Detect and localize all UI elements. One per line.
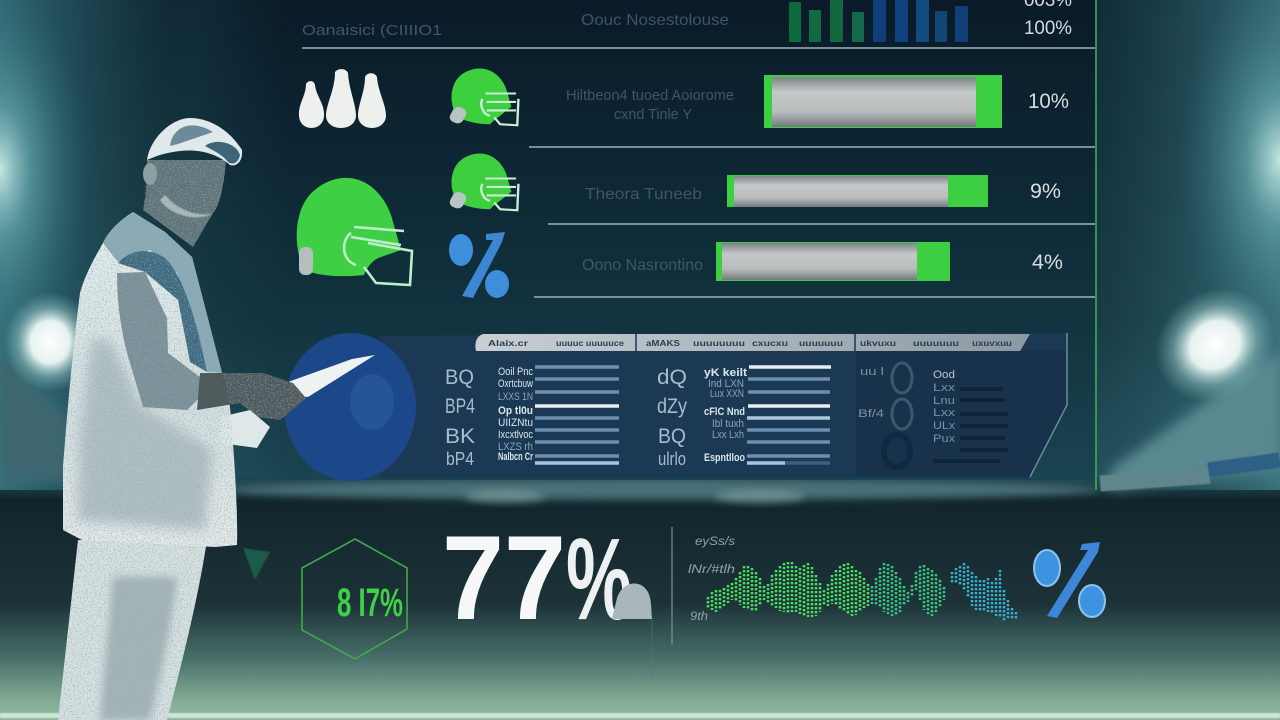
column 1 row glyphs: BP4: [445, 395, 475, 418]
row 2 label: Theora Tuneeb: [585, 186, 702, 203]
table header strip: cxucxu: [752, 339, 788, 348]
row 3 label: Oono Nasrontino: [582, 257, 703, 274]
row 2 value: 9%: [1030, 180, 1061, 203]
cap brim underside: [205, 142, 240, 164]
icon: blue percent large: [1034, 542, 1105, 618]
table header strip: uuuuuuuu: [693, 339, 745, 348]
dotted wave blue: [952, 563, 1016, 622]
column 3 label text: Bf/4: [858, 408, 884, 420]
column 1 row glyphs: bP4: [446, 449, 474, 469]
wave axis labels: [688, 534, 735, 623]
top percent values: 100%: [1024, 18, 1072, 39]
top percent values: [1024, 0, 1072, 39]
dark shoulder stripe: [118, 251, 207, 372]
column 3 label text: Lxx: [933, 407, 956, 419]
row 3 value: 4%: [1032, 251, 1063, 274]
sleeve: [117, 272, 200, 410]
column 3 label text: Ood: [933, 369, 955, 381]
table header strip: uxuvxuu: [972, 339, 1012, 348]
column 2 row labels: Ind LXN: [708, 378, 744, 390]
coach shirt: [63, 212, 237, 547]
hexagon stat badge: [302, 539, 407, 659]
table header strip: aMAKS: [646, 339, 681, 348]
column 3 dark stat bars: [934, 367, 1030, 461]
big stat: 77%: %: [566, 514, 632, 644]
cap: [147, 118, 242, 165]
vertical divider: [671, 527, 673, 645]
divider lines: [302, 48, 1095, 297]
section: top summary row: [302, 0, 1072, 42]
icon: blue percent small: [449, 232, 509, 298]
row 1 label: Hiltbeon4 tuoed Aoiorome: [566, 87, 734, 104]
coach trousers: [58, 540, 207, 720]
row 1 value: 10%: [1028, 90, 1069, 113]
big stat: 77%: [442, 511, 652, 645]
column 1 row labels: Oxrtcbuw: [498, 378, 533, 390]
heading: left top label: Oanaisici (CIIIIO1: [302, 22, 442, 39]
table header strip: ukvuxu: [860, 339, 896, 348]
column 2 row labels: Lux XXN: [710, 388, 744, 400]
column 3 label text: Pux: [933, 433, 956, 445]
icon: green helmet small 2: [448, 154, 518, 210]
column 1 row labels: LXZS rh: [498, 441, 533, 453]
heading: center top label: Oouc Nosestolouse: [581, 12, 729, 29]
icon: green helmet large: [297, 178, 412, 285]
table header strip: uuuuuuu: [913, 339, 959, 348]
column 1 stat bars: [535, 367, 619, 463]
column 2 row glyphs: BQ: [658, 425, 686, 448]
column 1 row glyphs: [445, 366, 475, 469]
wave axis labels: 9th: [690, 609, 708, 623]
figure: coach holding clipboard: [58, 118, 375, 720]
dotted wave green: [708, 562, 868, 617]
main data panel backdrop: [200, 0, 1096, 480]
speckle overlay: [58, 160, 306, 720]
column 1 row labels: [498, 366, 533, 463]
column 3 label text: Lnu: [933, 395, 955, 407]
big stat: 77%: 77: [442, 511, 566, 645]
column 2 row glyphs: ulrlo: [658, 449, 686, 469]
column 1 row glyphs: BK: [445, 425, 475, 448]
column 3 label text: Lxx: [933, 382, 956, 394]
icon: green helmet small 1: [448, 69, 518, 125]
column 2 row labels: yK keilt: [704, 367, 747, 379]
neck and head: [143, 160, 226, 247]
second white hand: [220, 410, 270, 448]
column 2 row labels: Espntlloo: [704, 452, 745, 464]
column 1 row labels: Ixcxtlvoc: [498, 429, 533, 441]
row 2: label, bar, value: [585, 175, 1061, 207]
column 3 ring gauges: [884, 363, 912, 467]
row 3: label, bar, value: [582, 242, 1063, 281]
chest panel: [103, 212, 222, 373]
trouser shading: [100, 577, 177, 720]
table header strip: uuuuc uuuuuce: [556, 339, 625, 348]
wave axis labels: eySs/s: [695, 534, 735, 548]
column 1 row labels: UIIZNtu: [498, 417, 533, 429]
icon: three white bottles: [299, 69, 386, 128]
table header strip: uuuuuuu: [799, 339, 843, 348]
row 2 bar: [727, 175, 988, 207]
column 2 row glyphs: [657, 366, 687, 469]
blue circle emblem: [284, 333, 416, 481]
row 1 sublabel: cxnd Tinle Y: [614, 106, 692, 123]
column 2 row labels: Lxx Lxh: [712, 429, 744, 441]
wave axis labels: lNr/#tlh: [688, 562, 735, 576]
column 3 label text: [858, 366, 956, 445]
column 1 row labels: Ooil Pnc: [498, 366, 533, 378]
row 1 bar: [764, 75, 1002, 128]
column 2 row glyphs: dQ: [657, 366, 687, 389]
vertical green edge line: [1095, 0, 1097, 490]
wave chart with small labels: [688, 534, 1016, 623]
column 1 row labels: LXXS 1N: [498, 391, 533, 403]
column 3 label text: ULx: [933, 420, 956, 432]
column 2 row glyphs: dZy: [657, 395, 687, 418]
table header strip: [475, 334, 1030, 351]
column 2 stat bars: [747, 367, 831, 463]
forearm and hand: [197, 373, 306, 420]
row 3 bar: [716, 242, 950, 281]
clipboard: [288, 355, 375, 397]
dotted wave teal: [872, 563, 944, 616]
column 1 row labels: Nalbcn Cr: [498, 451, 533, 463]
cap panel: [170, 125, 213, 146]
column 2 row labels: Ibl tuxh: [712, 418, 744, 430]
column 1 row labels: Op tl0u: [498, 405, 533, 417]
column 2 row labels: [704, 367, 747, 464]
mini bar chart: [789, 0, 968, 42]
column 3 label text: uu l: [860, 366, 884, 378]
hexagon stat badge: 8 I7%: [337, 581, 403, 625]
ear: [143, 163, 157, 185]
table header strip: Alaix.cr: [488, 339, 528, 348]
panel: statistics table: [284, 333, 1068, 481]
column 2 row labels: cFlC Nnd: [704, 406, 745, 418]
chin highlight: [160, 195, 212, 217]
row 1: label, bar, value: [566, 75, 1069, 128]
column 1 row glyphs: BQ: [445, 366, 474, 389]
shirt shading: [78, 340, 212, 530]
